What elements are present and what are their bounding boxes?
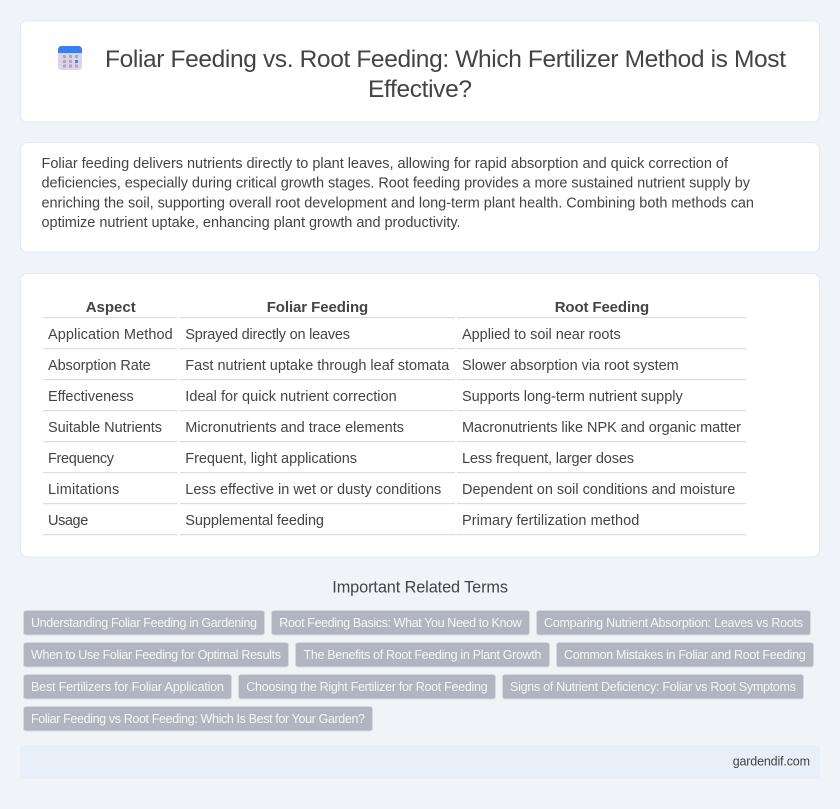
row: application method: Applied to soil near roots	[462, 327, 621, 343]
row: limitations: Less effective in wet or dusty conditions	[185, 482, 441, 498]
tag: Understanding Foliar Feeding in Gardening	[31, 616, 257, 630]
row: application method: Application Method	[48, 327, 173, 343]
tag	[272, 610, 530, 635]
row: limitations: Limitations	[48, 482, 119, 498]
row: usage: Primary fertilization method	[462, 513, 639, 529]
panel: comparison table	[20, 274, 820, 557]
title: Effective?	[368, 76, 472, 103]
row: absorption rate: Absorption Rate	[48, 358, 151, 374]
row: limitations	[48, 482, 735, 498]
panel: header	[20, 20, 820, 122]
row: effectiveness: Effectiveness	[48, 389, 134, 405]
tag: Signs of Nutrient Deficiency: Foliar vs Root Symptoms	[510, 680, 796, 694]
row: suitable nutrients: Micronutrients and trace elements	[185, 420, 404, 436]
text block: summary: enriching the soil, supporting overall root development and long-term plant health. Combining both methods can	[42, 196, 754, 212]
text block: summary: Foliar feeding delivers nutrients directly to plant leaves, allowing for rapid absorption and quick correction of	[42, 156, 729, 172]
tag	[24, 642, 288, 667]
row: application method	[48, 327, 621, 343]
tag	[24, 610, 264, 635]
row: usage	[48, 513, 639, 529]
tag: Choosing the Right Fertilizer for Root Feeding	[246, 680, 488, 694]
tag	[556, 642, 814, 667]
table header row: Root Feeding	[555, 299, 649, 316]
row: absorption rate	[48, 358, 679, 374]
row: usage: Usage	[48, 513, 88, 529]
footer source text: gardendif.com	[733, 755, 810, 769]
row: absorption rate: Fast nutrient uptake through leaf stomata	[185, 358, 450, 374]
icon: calendar	[58, 46, 82, 70]
row: effectiveness	[48, 389, 683, 405]
tag: Root Feeding Basics: What You Need to Know	[279, 616, 523, 630]
tag: Comparing Nutrient Absorption: Leaves vs Roots	[544, 616, 803, 630]
row: suitable nutrients: Macronutrients like NPK and organic matter	[462, 420, 741, 436]
tag: When to Use Foliar Feeding for Optimal Results	[31, 648, 281, 662]
row: suitable nutrients: Suitable Nutrients	[48, 420, 162, 436]
row: frequency	[48, 451, 634, 467]
row: application method: Sprayed directly on leaves	[185, 327, 350, 343]
table header row	[86, 299, 649, 316]
title	[105, 46, 786, 103]
tag	[24, 674, 232, 699]
tag: Foliar Feeding vs Root Feeding: Which Is Best for Your Garden?	[31, 712, 365, 726]
tag: The Benefits of Root Feeding in Plant Growth	[304, 648, 542, 662]
row: usage: Supplemental feeding	[185, 513, 324, 529]
row: frequency: Less frequent, larger doses	[462, 451, 634, 467]
row: effectiveness: Ideal for quick nutrient correction	[185, 389, 397, 405]
tag list: related terms	[24, 610, 814, 731]
text block: summary: deficiencies, especially during critical growth stages. Root feeding provides a more sustained nutrient supply by	[42, 176, 751, 192]
table header row: Aspect	[86, 299, 136, 316]
tag: Best Fertilizers for Foliar Application	[31, 680, 224, 694]
row: limitations: Dependent on soil conditions and moisture	[462, 482, 735, 498]
title: Foliar Feeding vs. Root Feeding: Which Fertilizer Method is Most	[105, 46, 786, 73]
table header row: Foliar Feeding	[267, 299, 368, 316]
row: effectiveness: Supports long-term nutrient supply	[462, 389, 683, 405]
row: frequency: Frequency	[48, 451, 115, 467]
heading: related terms: Important Related Terms	[332, 579, 508, 597]
tag	[238, 674, 496, 699]
footer	[20, 745, 820, 779]
tag	[24, 706, 372, 731]
text block: summary	[42, 156, 754, 231]
panel: intro paragraph	[20, 142, 820, 252]
row: frequency: Frequent, light applications	[185, 451, 357, 467]
text block: summary: optimize nutrient uptake, enhancing plant growth and productivity.	[42, 215, 460, 231]
tag	[296, 642, 550, 667]
row: suitable nutrients	[48, 420, 741, 436]
tag: Common Mistakes in Foliar and Root Feeding	[564, 648, 806, 662]
tag	[502, 674, 804, 699]
row: absorption rate: Slower absorption via root system	[462, 358, 679, 374]
tag	[536, 610, 810, 635]
